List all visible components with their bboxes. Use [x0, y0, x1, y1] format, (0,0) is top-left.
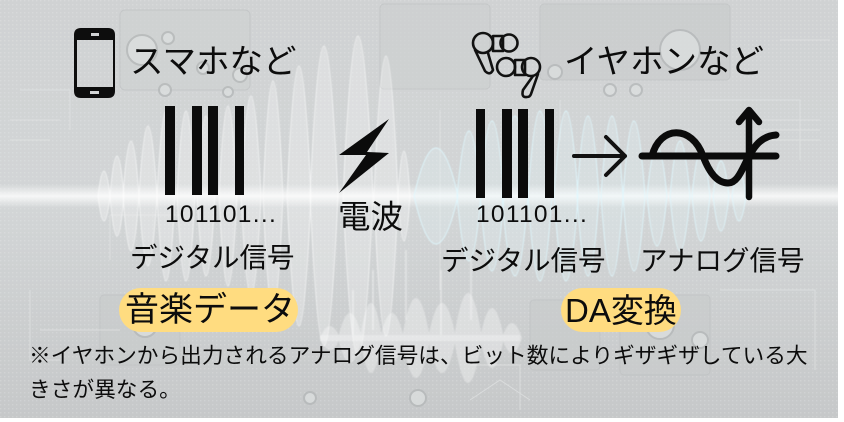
pill: music data	[119, 288, 298, 332]
label: right binary digits: 101101...	[476, 201, 588, 228]
label: left binary digits: 101101...	[165, 201, 277, 228]
heading: earphones: イヤホンなど	[564, 44, 764, 81]
label: music data: 音楽データ	[125, 291, 295, 329]
pill: DA conversion	[561, 288, 681, 332]
label: radio waves: 電波	[338, 199, 403, 235]
label: right digital signal: デジタル信号	[441, 245, 605, 276]
label: analog signal: アナログ信号	[640, 245, 804, 276]
heading: smartphones: スマホなど	[130, 44, 296, 81]
label: DA conversion: DA変換	[565, 292, 677, 329]
label: left digital signal: デジタル信号	[130, 242, 294, 273]
note text: ※イヤホンから出力されるアナログ信号は、ビット数によりギザギザしている大きさが異なる。	[29, 343, 808, 402]
